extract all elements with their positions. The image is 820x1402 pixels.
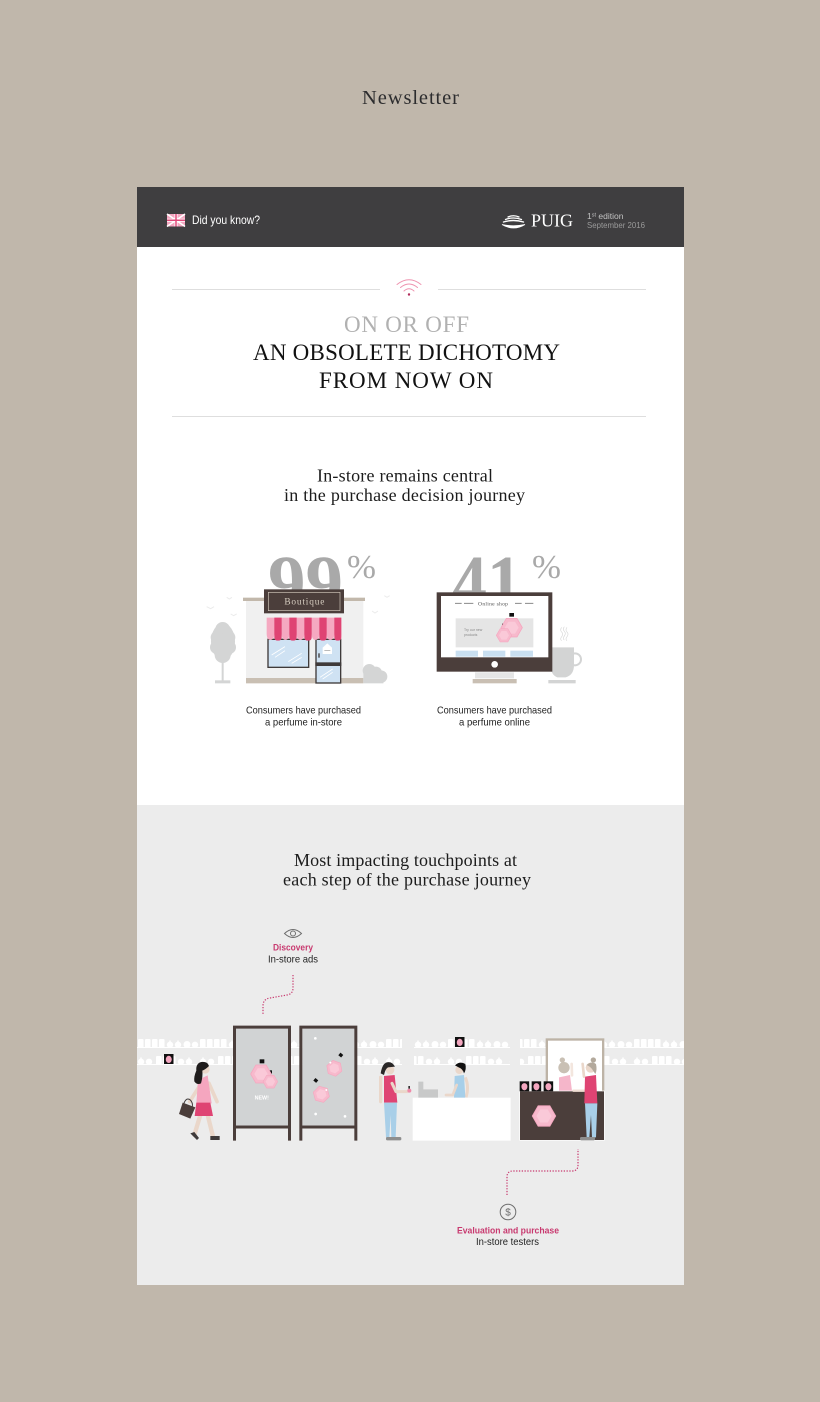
icon: dollar coin: $ — [505, 1208, 511, 1218]
illustration: desktop online shop with coffee cup: products — [464, 633, 478, 637]
cash desk — [413, 1098, 511, 1141]
caption: in-store: Consumers have purchased — [246, 704, 361, 716]
sales assistant — [446, 1063, 468, 1098]
cash register — [418, 1082, 438, 1098]
text: date: September 2016 — [587, 220, 645, 230]
text: discovery label: Discovery — [273, 942, 314, 954]
icon: perfume box on left shelf — [164, 1054, 174, 1064]
caption: in-store: a perfume in-store — [265, 716, 342, 728]
heading: in-store section — [284, 466, 525, 505]
icon: eye — [284, 930, 302, 938]
heading: article title — [253, 312, 560, 393]
tester counter — [520, 1091, 604, 1140]
illustration: desktop online shop with coffee cup: Try our new — [464, 628, 483, 632]
caption: online — [437, 704, 552, 728]
illustration: ad stand one — [233, 1026, 291, 1141]
heading: article title: ON OR OFF — [344, 312, 469, 337]
heading: article title: AN OBSOLETE DICHOTOMY — [253, 340, 560, 365]
panel: grey touchpoints panel — [137, 805, 684, 1285]
text: PUIG wordmark: PUIG — [531, 210, 573, 230]
text: in-store testers: In-store testers — [476, 1236, 539, 1248]
illustration: mirror and tester counter — [520, 1039, 604, 1140]
icon: wifi signal — [397, 280, 421, 296]
illustration: boutique storefront — [207, 589, 390, 683]
number: 99 percent: 99 — [268, 541, 343, 625]
illustration: checkout scene — [381, 1062, 511, 1141]
text: in-store ads: In-store ads — [268, 954, 318, 966]
heading: touchpoints section: Most impacting touchpoints at — [294, 850, 517, 870]
text: edition: st — [592, 212, 596, 218]
panel: white intro panel — [137, 247, 684, 805]
heading: in-store section: In-store remains central — [317, 466, 493, 486]
page title: Newsletter: Newsletter — [362, 87, 459, 109]
illustration: desktop online shop with coffee cup — [437, 592, 581, 683]
tester boxes — [520, 1081, 553, 1091]
number: 41 percent: 41 — [452, 541, 522, 625]
callout: discovery — [263, 930, 318, 1014]
number: 41 percent: % — [532, 549, 561, 586]
mirror — [547, 1039, 603, 1093]
illustration: ad stand one: NEW! — [255, 1095, 269, 1101]
text: edition: 1 — [587, 211, 592, 221]
heading: article title: FROM NOW ON — [319, 368, 493, 393]
chart: 99 percent in-store stat — [207, 541, 390, 728]
arrow: dotted path to ad stand — [263, 975, 293, 1014]
heading: touchpoints section: each step of the purchase journey — [283, 870, 531, 890]
illustration: ad stand two — [301, 1027, 356, 1141]
panel: header bar — [137, 187, 684, 247]
text: evaluation label: Evaluation and purchase — [457, 1226, 559, 1236]
icon: perfume box on centre shelf — [455, 1037, 464, 1047]
icon: UK flag — [167, 214, 185, 226]
text: edition: edition — [596, 211, 624, 221]
heading: touchpoints section — [283, 850, 531, 890]
caption: in-store — [246, 704, 361, 728]
reflection of shopper — [558, 1057, 572, 1091]
caption: online: Consumers have purchased — [437, 704, 552, 716]
shopper testing perfume — [573, 1057, 597, 1140]
chart: 41 percent online stat — [437, 541, 581, 728]
caption: online: a perfume online — [459, 716, 530, 728]
number: 41 percent — [452, 541, 561, 625]
icon: Puig logo waves — [502, 216, 525, 228]
callout: evaluation and purchase — [457, 1149, 578, 1248]
illustration: desktop online shop with coffee cup: Online shop — [478, 601, 508, 607]
illustration: store shelves — [137, 1038, 684, 1065]
arrow: dotted path from counter — [507, 1149, 578, 1195]
illustration: woman walking with bag — [179, 1062, 220, 1140]
number: 99 percent: % — [347, 549, 376, 586]
illustration: boutique storefront: Boutique — [284, 597, 324, 607]
counter bottle — [532, 1106, 556, 1126]
text: Did you know?: Did you know? — [192, 213, 260, 227]
customer at the till — [381, 1062, 411, 1140]
heading: in-store section: in the purchase decision journey — [284, 485, 525, 505]
